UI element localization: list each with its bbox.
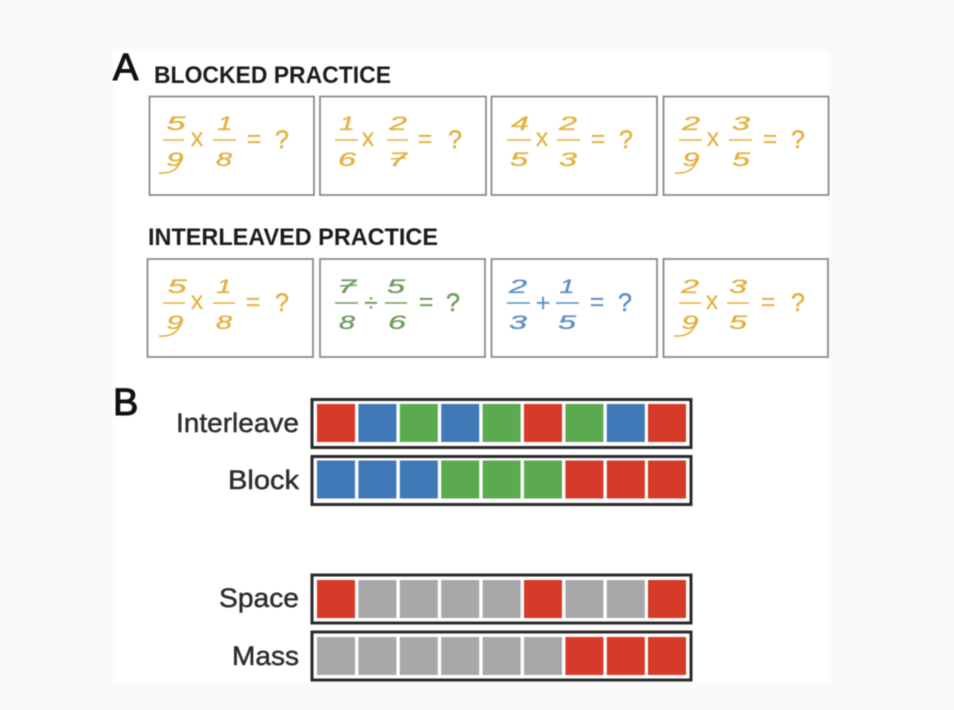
card: blocked 2: 6	[338, 150, 357, 171]
card: interleaved 3: 5	[558, 313, 577, 334]
card: interleaved 1	[148, 259, 313, 357]
heading: blocked practice: BLOCKED PRACTICE	[154, 62, 391, 89]
card: blocked 2: 7	[389, 150, 409, 171]
letter B: B	[113, 382, 138, 424]
card: blocked 1: 9	[166, 150, 184, 171]
card: interleaved 3	[492, 259, 657, 357]
letter A: A	[113, 47, 139, 89]
card: blocked 3: x	[536, 124, 549, 152]
label: mass: Mass	[232, 641, 299, 671]
card: interleaved 4: 5	[729, 313, 748, 334]
label: interleave: Interleave	[176, 408, 299, 438]
card: blocked 3	[492, 96, 657, 195]
card: blocked 1: ?	[275, 126, 289, 154]
card: interleaved 4: ?	[791, 289, 805, 317]
card: interleaved 1: x	[191, 287, 204, 315]
card: interleaved 3: 3	[509, 313, 528, 334]
card: interleaved 1: ?	[275, 289, 289, 317]
card: interleaved 4: =	[761, 288, 775, 316]
card: blocked 4	[664, 96, 828, 195]
card: blocked 3: ?	[619, 126, 633, 154]
section B: schedule bars	[113, 382, 691, 680]
card: blocked 2: x	[362, 124, 375, 152]
card: blocked 3: 5	[510, 150, 529, 171]
card: interleaved 2: 8	[339, 313, 356, 334]
row: space	[219, 575, 691, 623]
card: blocked 1: 8	[216, 150, 233, 171]
card: blocked 2: 1	[340, 114, 354, 135]
card: interleaved 2: ÷	[364, 289, 378, 317]
card: blocked 4: 2	[680, 114, 701, 135]
card: interleaved 1: =	[246, 288, 260, 316]
card: blocked 2	[320, 96, 486, 195]
card: blocked 4: 9	[682, 150, 700, 171]
card: interleaved 1: 5	[168, 277, 187, 298]
card: blocked 3: 3	[559, 150, 578, 171]
card: interleaved 3: 2	[507, 277, 528, 298]
card: blocked 4: x	[707, 124, 720, 152]
bar: spaced sequence	[312, 575, 691, 623]
card: blocked 1: x	[191, 124, 204, 152]
section A: practice schedules	[113, 47, 828, 357]
card: blocked 3: =	[591, 125, 605, 153]
card: blocked 4: 5	[732, 150, 751, 171]
card: blocked 4: =	[763, 125, 777, 153]
row: block	[228, 456, 691, 504]
card: interleaved 4	[664, 259, 828, 357]
card: blocked 2: =	[418, 125, 432, 153]
card: blocked 2: 2	[387, 114, 408, 135]
card: blocked 3: 2	[557, 114, 578, 135]
card: interleaved 2: 7	[338, 277, 358, 298]
card: interleaved 2: 5	[387, 277, 406, 298]
card: blocked 2: ?	[448, 126, 462, 154]
card: blocked 4: ?	[791, 126, 805, 154]
card: blocked 1: 5	[166, 114, 186, 135]
card: interleaved 3: +	[536, 289, 550, 317]
row: mass	[232, 632, 691, 680]
card: interleaved 1: 8	[216, 313, 233, 334]
heading: interleaved practice: INTERLEAVED PRACTICE	[148, 224, 438, 251]
panel: white figure background	[113, 50, 829, 682]
card: interleaved 2: 6	[388, 313, 407, 334]
card: interleaved 2: =	[419, 288, 433, 316]
row: interleave	[176, 400, 691, 448]
bar: interleave sequence	[312, 400, 691, 448]
card: interleaved 1: 1	[216, 277, 232, 298]
card: blocked 4: 3	[732, 114, 751, 135]
card: interleaved 3: 1	[560, 277, 574, 298]
card: interleaved 2: ?	[446, 289, 460, 317]
card: interleaved 4: 3	[729, 277, 748, 298]
card: interleaved 4: 2	[679, 277, 700, 298]
label: space: Space	[219, 583, 299, 613]
bar: block sequence	[312, 456, 691, 504]
card: interleaved 3: ?	[618, 289, 632, 317]
card: interleaved 4: 9	[682, 313, 699, 334]
card: blocked 1	[150, 96, 314, 195]
card: interleaved 4: x	[706, 287, 719, 315]
card: interleaved 3: =	[590, 288, 604, 316]
card: blocked 1: 1	[218, 114, 232, 135]
card: blocked 1: =	[247, 125, 261, 153]
card: interleaved 2	[320, 259, 485, 357]
card: interleaved 1: 9	[166, 313, 184, 334]
label: block: Block	[228, 465, 300, 495]
bar: massed sequence	[312, 632, 691, 680]
card: blocked 3: 4	[511, 114, 529, 135]
